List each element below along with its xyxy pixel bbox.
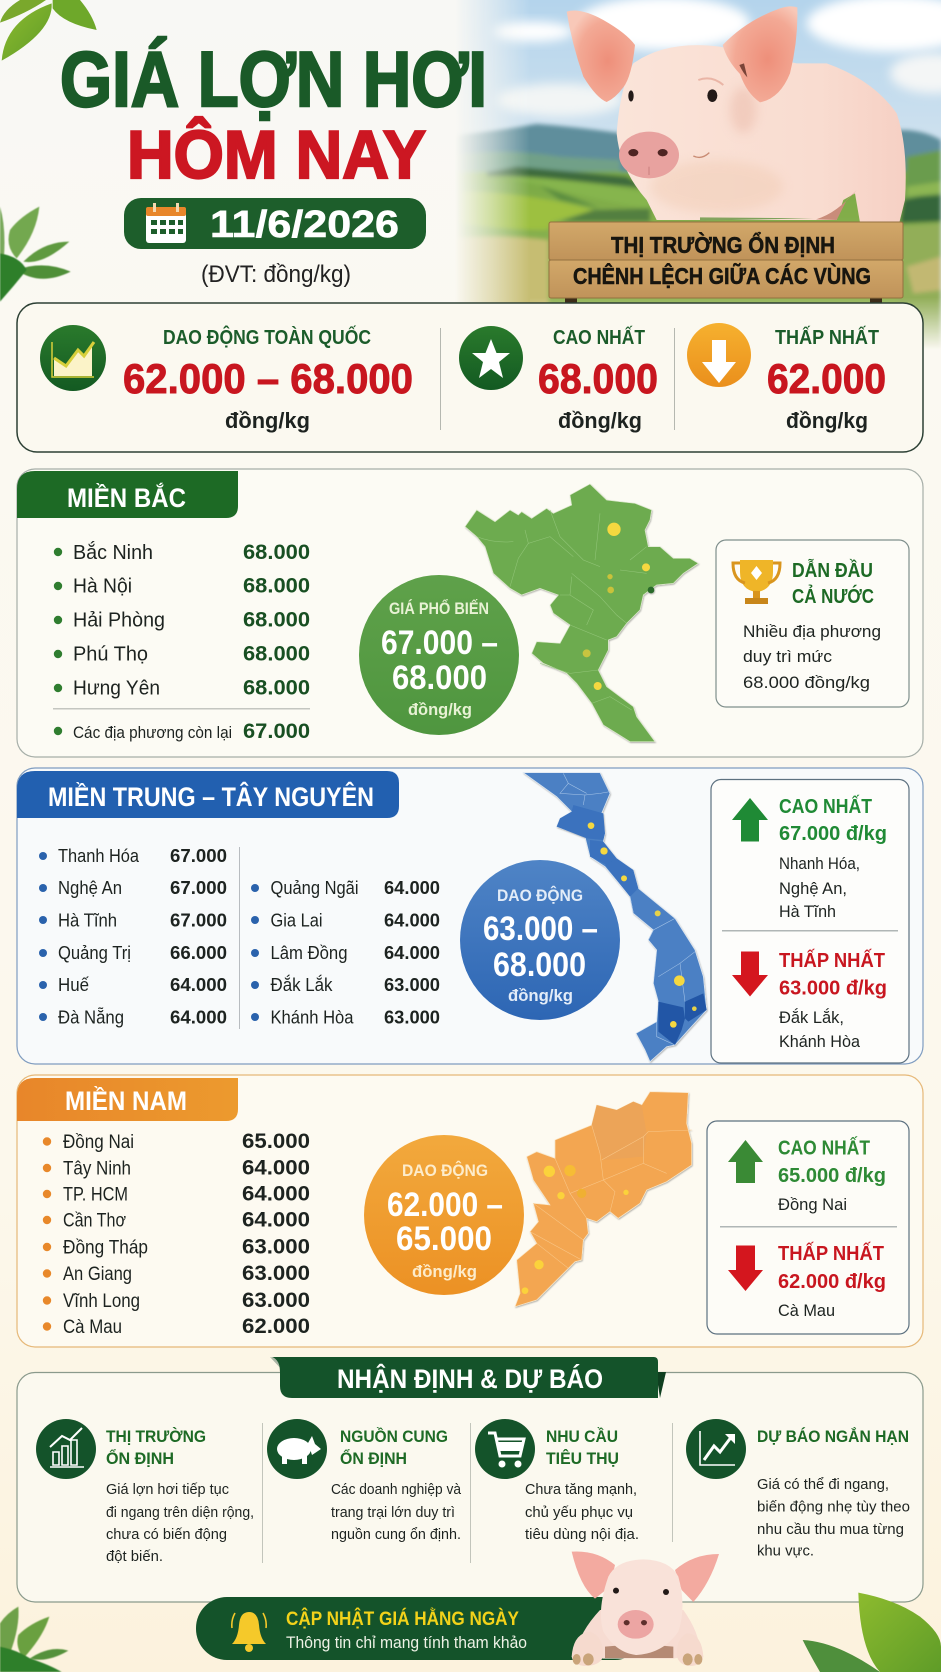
- price circle: Miền Bắc: [359, 575, 519, 735]
- column: stable market: THỊ TRƯỜNG: [106, 1427, 206, 1446]
- column: short-term forecast: [686, 1419, 910, 1560]
- tab heading: Miền Trung – Tây Nguyên: [17, 771, 399, 818]
- price list: central right column: Khánh Hòa: [270, 1008, 354, 1028]
- price row: Hà Nội: [54, 574, 310, 598]
- lowest central price: THẤP NHẤT: [779, 949, 885, 972]
- price list: central right column: Lâm Đồng: [270, 943, 348, 963]
- column: short-term forecast: khu vực.: [757, 1543, 814, 1560]
- lowest southern price: THẤP NHẤT: [778, 1242, 884, 1265]
- panel: outlook and forecast: [17, 1357, 923, 1602]
- tab heading: Miền Bắc: [17, 471, 238, 518]
- tab heading: Miền Bắc: MIỀN BẮC: [67, 482, 186, 513]
- title: [60, 35, 487, 193]
- price list: southern provinces: Cà Mau: [63, 1317, 122, 1338]
- price list: southern provinces: 64.000: [242, 1182, 310, 1206]
- price row: Phú Thọ: 68.000: [243, 642, 310, 666]
- icon: star: [459, 326, 523, 390]
- price list: southern provinces: 64.000: [242, 1209, 310, 1232]
- column: stable supply: NGUỒN CUNG: [340, 1427, 448, 1446]
- price row: Hải Phòng: Hải Phòng: [73, 610, 165, 632]
- price list: central right column: 64.000: [384, 877, 440, 898]
- lowest price: 62.000: [767, 355, 886, 402]
- icon: up arrow: [732, 798, 768, 842]
- price list: central right column: Quảng Ngãi: [270, 878, 358, 898]
- price list: central left column: 64.000: [170, 974, 227, 995]
- column: consumer demand: TIÊU THỤ: [546, 1449, 619, 1468]
- column: stable market: ỔN ĐỊNH: [106, 1449, 174, 1468]
- price list: southern provinces: Đồng Tháp: [63, 1238, 148, 1258]
- decorative leaf cluster: top left: [0, 0, 97, 61]
- wooden sign: [549, 222, 903, 305]
- icon: bell: [232, 1612, 266, 1652]
- lowest southern price: 62.000 đ/kg: [778, 1271, 886, 1293]
- pig eyes: [628, 78, 723, 102]
- column: stable market: [36, 1419, 254, 1565]
- price circle: Miền Bắc: 68.000: [392, 659, 487, 697]
- icon: bar chart: [36, 1419, 96, 1479]
- column: stable supply: [267, 1419, 462, 1543]
- column: stable supply: Các doanh nghiệp và: [331, 1481, 462, 1498]
- price row: Hải Phòng: 68.000: [243, 608, 310, 632]
- callout: leading nationally: duy trì mức: [743, 647, 833, 666]
- wooden sign: CHÊNH LỆCH GIỮA CÁC VÙNG: [573, 262, 871, 289]
- pig snout: [619, 132, 679, 178]
- pig ears: [567, 6, 797, 102]
- price circle: Miền Trung: 68.000: [493, 946, 586, 984]
- price circle: Miền Trung: DAO ĐỘNG: [497, 886, 583, 905]
- callout: leading nationally: 68.000 đồng/kg: [743, 673, 870, 692]
- highest southern price: [778, 1136, 886, 1214]
- icon: trophy: [733, 560, 780, 604]
- panel: Miền Bắc: [17, 469, 923, 757]
- highest price: [538, 326, 658, 433]
- highest central price: [779, 795, 887, 921]
- column: short-term forecast: Giá có thể đi ngang,: [757, 1476, 889, 1493]
- footer banner: Thông tin chỉ mang tính tham khảo: [286, 1633, 527, 1652]
- price row: Hưng Yên: Hưng Yên: [73, 678, 160, 700]
- price list: central left column: Nghệ An: [58, 878, 122, 898]
- icon: calendar: [146, 203, 186, 243]
- price list: central left column: 64.000: [170, 1006, 227, 1028]
- highest price: CAO NHẤT: [553, 326, 645, 349]
- price row: remaining localities: Các địa phương còn lại: [73, 723, 232, 742]
- icon: down arrow: [728, 1246, 763, 1291]
- icon: up arrow: [728, 1140, 763, 1183]
- price list: southern provinces: Đồng Nai: [63, 1132, 134, 1153]
- column: stable supply: ỔN ĐỊNH: [340, 1449, 407, 1468]
- title: HÔM NAY: [127, 116, 426, 193]
- highest central price: CAO NHẤT: [779, 795, 872, 818]
- map: southern Vietnam: [515, 1092, 692, 1307]
- icon: down arrow: [687, 323, 751, 387]
- wooden sign: THỊ TRƯỜNG ỔN ĐỊNH: [611, 231, 835, 258]
- date pill: [124, 198, 426, 249]
- tab heading: Miền Trung – Tây Nguyên: MIỀN TRUNG – TÂY NGUYÊN: [48, 781, 374, 812]
- highest central price: Nghệ An,: [779, 879, 847, 898]
- price row: Phú Thọ: Phú Thọ: [73, 644, 148, 666]
- callout: southern high and low: [707, 1121, 909, 1334]
- price circle: Miền Bắc: GIÁ PHỔ BIẾN: [389, 599, 489, 618]
- highest southern price: Đồng Nai: [778, 1195, 847, 1214]
- decorative leaf cluster: bottom right: [803, 1593, 941, 1672]
- price list: central left column: 67.000: [170, 845, 227, 866]
- ribbon heading: [270, 1357, 666, 1398]
- price list: central right column: 64.000: [384, 942, 440, 963]
- price list: southern provinces: 62.000: [242, 1315, 310, 1338]
- small pig paws: [572, 1632, 703, 1666]
- highest southern price: 65.000 đ/kg: [778, 1165, 886, 1187]
- unit note: (ĐVT: đồng/kg): [201, 261, 351, 288]
- price list: southern provinces: An Giang: [63, 1264, 132, 1285]
- price list: southern provinces: 65.000: [242, 1130, 310, 1153]
- icon: shopping cart: [475, 1419, 535, 1479]
- price circle: Miền Nam: DAO ĐỘNG: [402, 1161, 488, 1180]
- price circle: Miền Bắc: 67.000 –: [381, 624, 498, 662]
- price list: central left column: [39, 845, 227, 1028]
- national range: 62.000 – 68.000: [123, 355, 413, 402]
- callout: leading nationally: DẪN ĐẦU: [792, 559, 873, 582]
- callout: leading nationally: [716, 540, 909, 707]
- column: short-term forecast: biến động nhẹ tùy theo: [757, 1498, 910, 1516]
- icon: trend line: [686, 1419, 746, 1479]
- column: stable supply: nguồn cung ổn định.: [331, 1526, 461, 1543]
- tab heading: Miền Nam: MIỀN NAM: [65, 1085, 187, 1116]
- price row: Bắc Ninh: 68.000: [243, 541, 310, 564]
- price list: central left column: Huế: [58, 975, 89, 995]
- icon: down arrow: [732, 952, 768, 996]
- price circle: Miền Trung: 63.000 –: [483, 910, 598, 948]
- map: central Vietnam: [523, 773, 707, 1062]
- price row: Hải Phòng: [54, 608, 310, 632]
- column: stable supply: trang trại lớn duy trì: [331, 1504, 455, 1521]
- price list: central right column: Đắk Lắk: [270, 974, 333, 995]
- column: consumer demand: NHU CẦU: [546, 1427, 618, 1446]
- highest central price: Nhanh Hóa,: [779, 854, 860, 873]
- national range: [123, 325, 413, 433]
- price row: Hưng Yên: 68.000: [243, 676, 310, 700]
- panel: Miền Nam: [17, 1075, 923, 1347]
- price list: southern provinces: 63.000: [242, 1262, 310, 1285]
- price circle: Miền Nam: 65.000: [396, 1220, 492, 1258]
- small pig snout: [618, 1610, 654, 1639]
- lowest price: đồng/kg: [786, 408, 868, 433]
- lowest southern price: Cà Mau: [778, 1301, 835, 1320]
- footer banner: CẬP NHẬT GIÁ HẰNG NGÀY: [286, 1608, 519, 1630]
- title: GIÁ LỢN HƠI: [60, 35, 487, 123]
- lowest central price: [779, 949, 887, 1051]
- price list: southern provinces: [43, 1130, 310, 1338]
- highest southern price: CAO NHẤT: [778, 1136, 870, 1160]
- highest price: 68.000: [538, 355, 658, 402]
- panel: national summary: [17, 303, 923, 452]
- price list: southern provinces: Vĩnh Long: [63, 1291, 140, 1312]
- price list: central right column: [251, 877, 440, 1028]
- price list: southern provinces: 63.000: [242, 1289, 310, 1312]
- price list: southern provinces: 64.000: [242, 1156, 310, 1179]
- national range: DAO ĐỘNG TOÀN QUỐC: [163, 325, 371, 349]
- callout: leading nationally: CẢ NƯỚC: [792, 584, 874, 608]
- column: consumer demand: [475, 1419, 639, 1543]
- callout: leading nationally: Nhiều địa phương: [743, 622, 881, 641]
- highest central price: Hà Tĩnh: [779, 902, 836, 921]
- icon: rising chart: [40, 325, 106, 391]
- price list: central left column: 67.000: [170, 877, 227, 898]
- price list: central left column: Hà Tĩnh: [58, 910, 117, 930]
- decorative leaf cluster: bottom left: [0, 1607, 68, 1672]
- price circle: Miền Nam: [364, 1135, 524, 1295]
- column: consumer demand: chủ yếu phục vụ: [525, 1504, 633, 1521]
- price list: southern provinces: Tây Ninh: [63, 1158, 131, 1179]
- price list: central left column: Quảng Trị: [58, 943, 131, 963]
- column: short-term forecast: DỰ BÁO NGẮN HẠN: [757, 1427, 909, 1446]
- price row: remaining localities: [54, 720, 310, 743]
- price row: Hà Nội: 68.000: [243, 574, 310, 598]
- column: stable market: Giá lợn hơi tiếp tục: [106, 1481, 229, 1498]
- footer banner: [196, 1597, 646, 1660]
- price circle: Miền Nam: 62.000 –: [387, 1186, 503, 1224]
- ribbon heading: NHẬN ĐỊNH & DỰ BÁO: [337, 1363, 603, 1394]
- big pig photo: [567, 6, 906, 223]
- column: short-term forecast: nhu cầu thu mua từng: [757, 1521, 904, 1538]
- price list: central left column: 67.000: [170, 910, 227, 930]
- tab heading: Miền Nam: [17, 1078, 238, 1121]
- price list: central right column: 64.000: [384, 910, 440, 930]
- column: consumer demand: Chưa tăng mạnh,: [525, 1481, 637, 1498]
- lowest southern price: [778, 1242, 886, 1320]
- price row: Bắc Ninh: Bắc Ninh: [73, 541, 153, 564]
- price list: central right column: 63.000: [384, 1006, 440, 1028]
- highest price: đồng/kg: [558, 408, 642, 433]
- lowest price: THẤP NHẤT: [775, 326, 879, 349]
- price row: Hưng Yên: [54, 676, 310, 700]
- price row: Phú Thọ: [54, 642, 310, 666]
- farm landscape scene: [440, 0, 941, 350]
- price list: central left column: 66.000: [170, 942, 227, 963]
- lowest central price: Khánh Hòa: [779, 1032, 861, 1051]
- date pill: 11/6/2026: [210, 204, 399, 246]
- price list: southern provinces: Cần Thơ: [63, 1211, 126, 1232]
- price circle: Miền Trung: đồng/kg: [508, 986, 573, 1005]
- column: consumer demand: tiêu dùng nội địa.: [525, 1526, 639, 1543]
- price list: central right column: 63.000: [384, 974, 440, 995]
- price list: central right column: Gia Lai: [270, 910, 322, 930]
- price list: southern provinces: 63.000: [242, 1236, 310, 1258]
- price circle: Miền Nam: đồng/kg: [412, 1262, 477, 1281]
- price circle: Miền Bắc: đồng/kg: [408, 700, 472, 719]
- price row: Hà Nội: Hà Nội: [73, 576, 132, 598]
- map: northern Vietnam: [465, 484, 698, 742]
- lowest central price: 63.000 đ/kg: [779, 978, 887, 1000]
- price circle: Miền Trung: [460, 860, 620, 1020]
- callout: central high and low: [711, 780, 909, 1063]
- price list: central left column: Thanh Hóa: [58, 846, 140, 866]
- price list: southern provinces: TP. HCM: [63, 1184, 128, 1206]
- decorative leaf cluster: left edge: [0, 207, 71, 302]
- lowest price: [767, 326, 886, 433]
- icon: pig: [267, 1419, 327, 1479]
- lowest central price: Đắk Lắk,: [779, 1008, 844, 1027]
- column: stable market: đột biến.: [106, 1548, 163, 1565]
- price row: Bắc Ninh: [54, 541, 310, 564]
- highest central price: 67.000 đ/kg: [779, 823, 887, 845]
- panel: Miền Trung – Tây Nguyên: [17, 768, 923, 1064]
- price row: remaining localities: 67.000: [243, 720, 310, 743]
- column: stable market: đi ngang trên diện rộng,: [106, 1504, 254, 1521]
- national range: đồng/kg: [225, 408, 310, 433]
- small pig with paws: [572, 1551, 719, 1666]
- price list: central left column: Đà Nẵng: [58, 1008, 124, 1028]
- column: stable market: chưa có biến động: [106, 1526, 227, 1543]
